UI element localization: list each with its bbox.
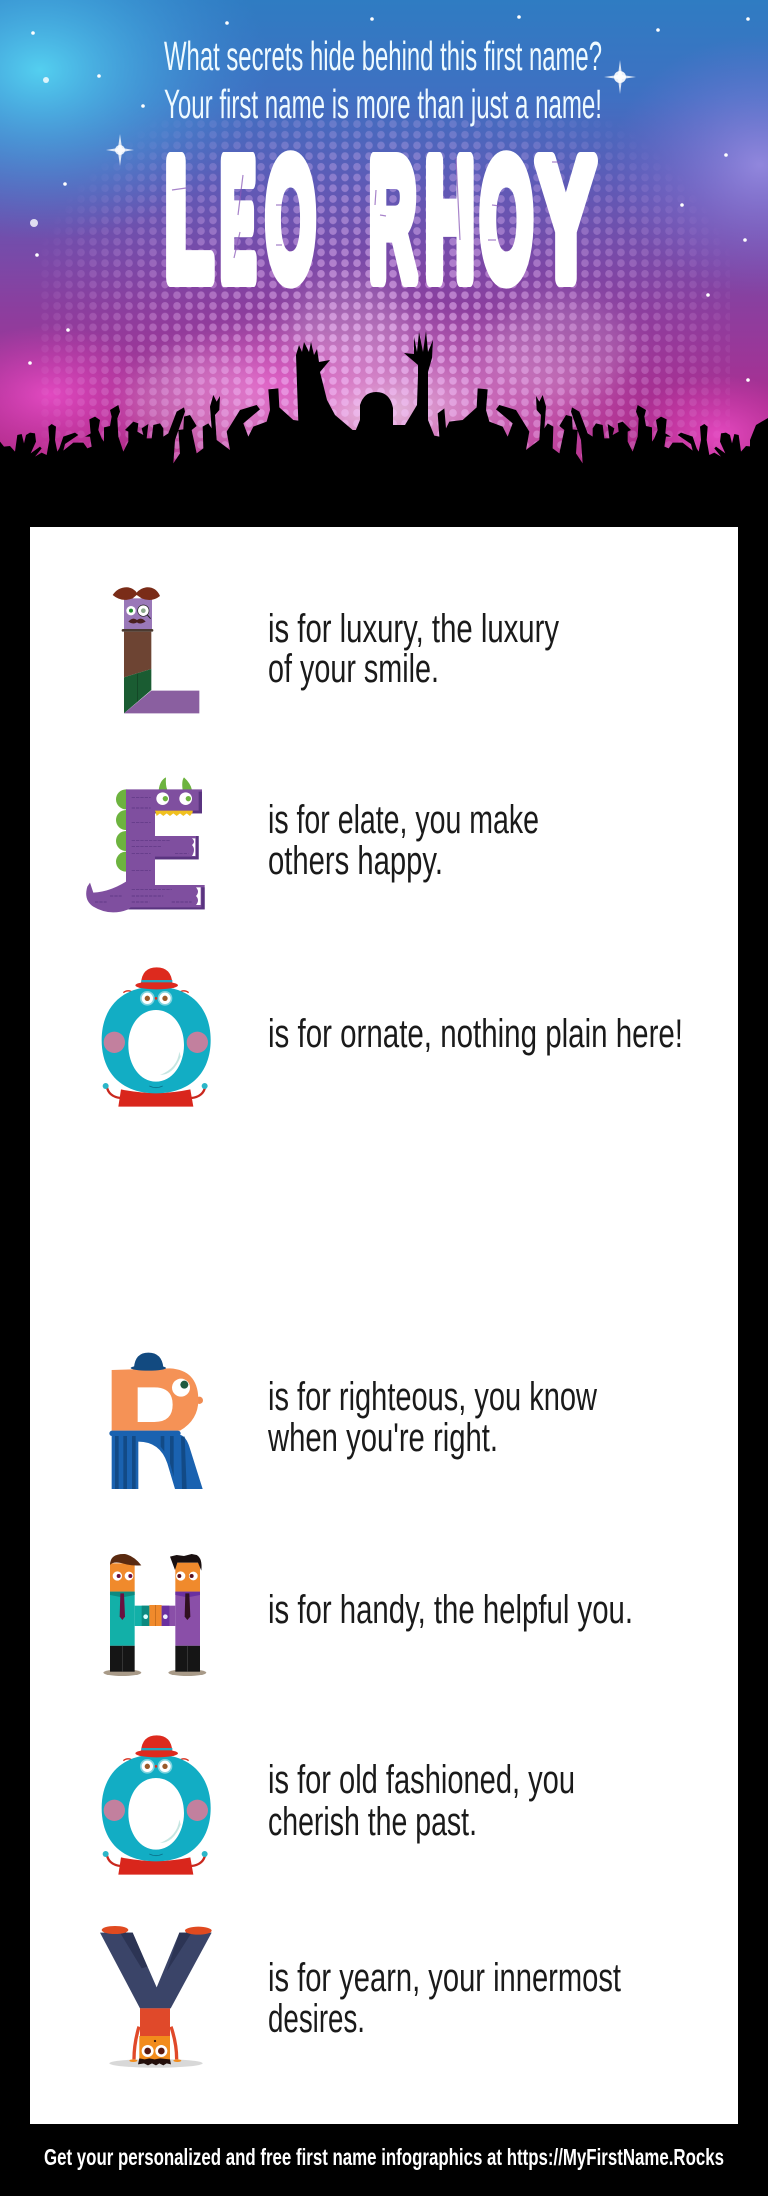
text: H: is for handy, the helpful you. xyxy=(268,1588,633,1632)
crowd silhouette xyxy=(0,331,768,527)
text: E: others happy. xyxy=(268,839,443,883)
text: L: of your smile. xyxy=(268,647,439,691)
text: E: is for elate, you make xyxy=(268,798,539,842)
panel: letters xyxy=(30,527,738,2124)
title: name: H xyxy=(425,125,475,315)
title: name: R xyxy=(369,125,416,315)
text: O second: is for old fashioned, you xyxy=(268,1758,575,1802)
icon: letter R face xyxy=(109,1353,203,1489)
header stage background xyxy=(0,0,768,464)
icon: letter H handshake xyxy=(103,1554,206,1676)
title: name: O xyxy=(480,125,533,315)
text: Y: desires. xyxy=(268,1997,365,2041)
text: O second: cherish the past. xyxy=(268,1800,477,1844)
icon: letter Y handstand xyxy=(100,1926,212,2068)
icon: letter O with hat xyxy=(102,967,211,1107)
text: L xyxy=(268,607,559,691)
heading: tagline xyxy=(164,33,602,127)
text: R xyxy=(267,1375,597,1460)
title: name xyxy=(165,125,595,315)
text: Y: is for yearn, your innermost xyxy=(268,1956,621,2000)
title: name: O xyxy=(266,125,316,315)
icon: letter O with hat (second) xyxy=(102,1735,211,1875)
title: name: L xyxy=(165,125,213,315)
text: L: is for luxury, the luxury xyxy=(268,607,559,651)
icon: letter E dragon xyxy=(86,777,205,912)
text: R: when you're right. xyxy=(267,1416,498,1460)
sparkles xyxy=(28,15,750,382)
text: E xyxy=(268,798,539,883)
title: name: E xyxy=(220,125,256,315)
title: name: Y xyxy=(537,125,595,315)
text: Y xyxy=(268,1956,621,2041)
text: O second xyxy=(268,1758,575,1844)
icon: letter L gentleman xyxy=(113,587,199,713)
text: R: is for righteous, you know xyxy=(268,1375,597,1419)
